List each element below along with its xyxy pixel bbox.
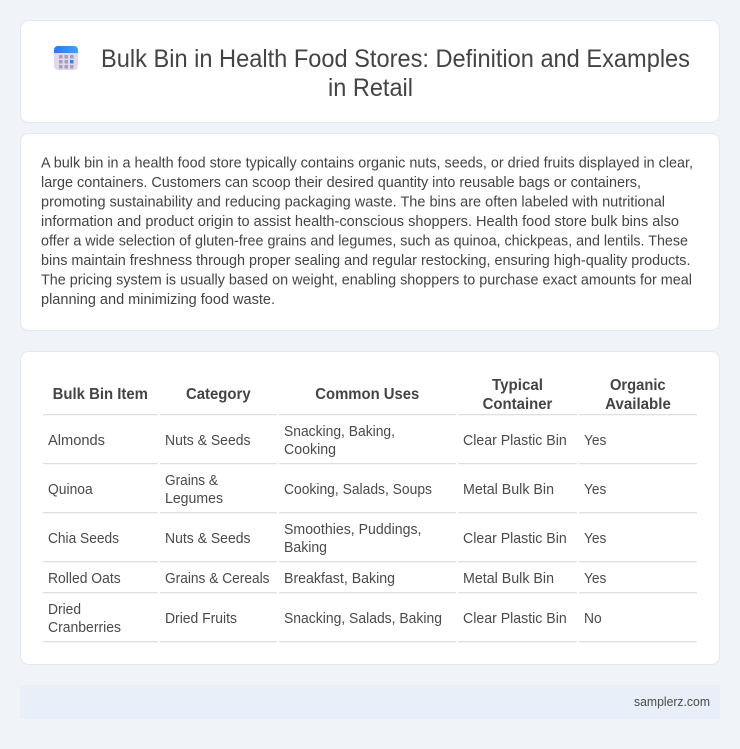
table row: quinoa: Legumes bbox=[165, 491, 223, 507]
table header: Common Uses bbox=[315, 386, 419, 403]
title: Bulk Bin in Health Food Stores: Definition and Examples bbox=[101, 45, 690, 73]
text block: description: bins maintain freshness through proper sealing and regular restocking, ensuring high-quality products. bbox=[41, 253, 690, 269]
table row: rolled oats: Rolled Oats bbox=[48, 571, 121, 587]
text block: description: planning and minimizing food waste. bbox=[41, 292, 275, 308]
table row: chia seeds bbox=[43, 522, 697, 562]
table row: rolled oats bbox=[43, 571, 697, 593]
table header: Typical bbox=[492, 377, 543, 394]
table header: Bulk Bin Item bbox=[53, 386, 148, 403]
title bbox=[101, 45, 690, 102]
table header: Organic bbox=[610, 377, 666, 394]
table row: almonds: Yes bbox=[584, 433, 606, 449]
text block: description: promoting sustainability and reducing packaging waste. The bins are often labeled with nutritional bbox=[41, 194, 665, 210]
text block: description: offer a wide selection of gluten-free grains and legumes, such as quinoa, chickpeas, and lentils. These bbox=[41, 234, 688, 250]
table row: rolled oats: Metal Bulk Bin bbox=[463, 571, 554, 587]
table header: Category bbox=[186, 386, 251, 403]
panel: title card bbox=[20, 20, 720, 122]
icon: calendar bbox=[54, 46, 78, 70]
title: in Retail bbox=[328, 74, 413, 102]
table row: quinoa bbox=[43, 473, 697, 513]
table header: Container bbox=[483, 396, 552, 413]
table row: almonds: Snacking, Baking, bbox=[284, 424, 395, 440]
table row: quinoa: Grains & bbox=[165, 473, 218, 489]
table row: chia seeds: Nuts & Seeds bbox=[165, 531, 250, 547]
table row: chia seeds: Baking bbox=[284, 540, 327, 556]
table header bbox=[43, 377, 697, 415]
table row: quinoa: Yes bbox=[584, 482, 606, 498]
table row: dried cranberries: No bbox=[584, 611, 602, 627]
table row: chia seeds: Clear Plastic Bin bbox=[463, 531, 567, 547]
table row: dried cranberries: Cranberries bbox=[48, 620, 121, 636]
table row: dried cranberries: Dried Fruits bbox=[165, 611, 237, 627]
table row: rolled oats: Breakfast, Baking bbox=[284, 571, 395, 587]
table header: Available bbox=[605, 396, 671, 413]
table row: quinoa: Quinoa bbox=[48, 482, 93, 498]
table row: dried cranberries: Clear Plastic Bin bbox=[463, 611, 567, 627]
footer bar bbox=[20, 685, 720, 719]
table row: chia seeds: Chia Seeds bbox=[48, 531, 119, 547]
table row: dried cranberries: Dried bbox=[48, 602, 81, 618]
text block: description: A bulk bin in a health food store typically contains organic nuts, seeds, or dried fruits displayed in clear, bbox=[41, 156, 693, 172]
table row: chia seeds: Smoothies, Puddings, bbox=[284, 522, 422, 538]
table row: rolled oats: Yes bbox=[584, 571, 606, 587]
table row: almonds: Nuts & Seeds bbox=[165, 433, 250, 449]
table row: dried cranberries bbox=[43, 602, 697, 642]
table row: rolled oats: Grains & Cereals bbox=[165, 571, 270, 587]
panel: table card bbox=[20, 352, 720, 664]
panel: description bbox=[20, 134, 720, 330]
table row: almonds: Cooking bbox=[284, 442, 336, 458]
table row: almonds: Almonds bbox=[48, 433, 105, 449]
table row: almonds: Clear Plastic Bin bbox=[463, 433, 567, 449]
table row: almonds bbox=[43, 424, 697, 464]
text block: description: The pricing system is usually based on weight, enabling shoppers to purchase exact amounts for meal bbox=[41, 272, 692, 288]
table row: quinoa: Cooking, Salads, Soups bbox=[284, 482, 432, 498]
text block: description bbox=[41, 156, 693, 308]
text block: description: information and product origin to assist health-conscious shoppers. Health food store bulk bins also bbox=[41, 214, 679, 230]
text block: description: large containers. Customers can scoop their desired quantity into reusable bags or containers, bbox=[41, 175, 641, 191]
table row: quinoa: Metal Bulk Bin bbox=[463, 482, 554, 498]
table row: chia seeds: Yes bbox=[584, 531, 606, 547]
footer text: samplerz.com bbox=[634, 695, 710, 709]
table row: dried cranberries: Snacking, Salads, Baking bbox=[284, 611, 442, 627]
